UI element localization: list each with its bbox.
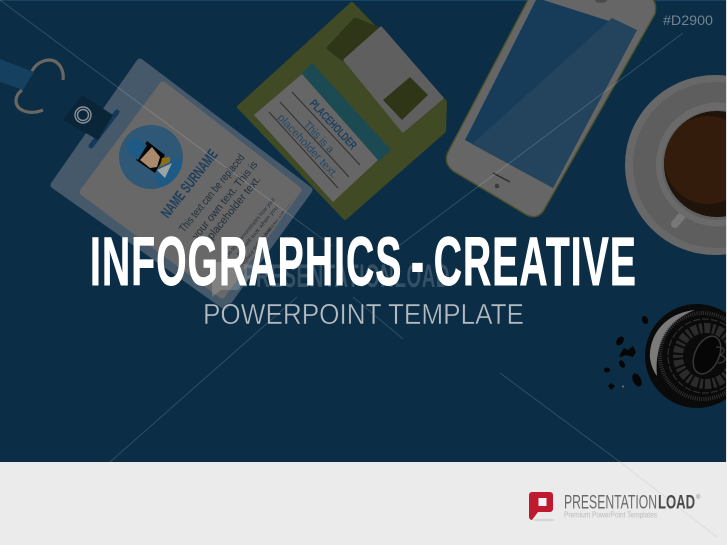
lanyard — [0, 59, 63, 112]
product code: #D2900 — [663, 13, 713, 28]
badge body text: text will look when you — [236, 205, 280, 257]
badge body text: own text — [255, 226, 274, 247]
floppy disk: placeholder text. — [275, 112, 340, 181]
smartphone — [446, 0, 656, 217]
watermark logo: PRESENTATIONLOAD — [243, 258, 450, 294]
logo wordmark: PRESENTATION — [564, 492, 657, 514]
id badge — [54, 62, 309, 306]
illustration group — [0, 0, 727, 408]
coffee cup — [625, 75, 727, 255]
watermark logo — [212, 258, 450, 297]
cookie — [645, 304, 727, 408]
cookie crumbs — [604, 315, 649, 390]
badge body text: replace this placeholder with your — [240, 200, 296, 267]
footer logo — [529, 492, 701, 521]
floppy label text: PLACEHOLDER — [307, 98, 359, 152]
shutter — [345, 28, 442, 131]
floppy disk — [239, 4, 445, 218]
footer logo: ® — [696, 494, 701, 501]
badge body text: placeholder text. — [205, 174, 263, 242]
watermark lines — [0, 0, 683, 462]
badge body text: This text can be replaced — [177, 152, 247, 235]
subtitle: POWERPOINT TEMPLATE — [203, 299, 524, 331]
floppy disk: This is a — [301, 119, 337, 156]
logo icon — [529, 492, 555, 521]
logo tagline: Premium PowerPoint Templates — [564, 510, 657, 520]
avatar — [119, 125, 183, 189]
badge card — [83, 85, 298, 295]
badge body text: This text demonstrates how your — [223, 197, 277, 261]
badge body text: your own text. This is — [190, 159, 261, 242]
name: NAME SURNAME — [158, 146, 222, 221]
footer logo: LOAD — [658, 492, 695, 514]
label — [300, 63, 391, 162]
badge clip — [63, 95, 113, 140]
badge body text — [177, 152, 296, 267]
footer band — [0, 462, 727, 545]
